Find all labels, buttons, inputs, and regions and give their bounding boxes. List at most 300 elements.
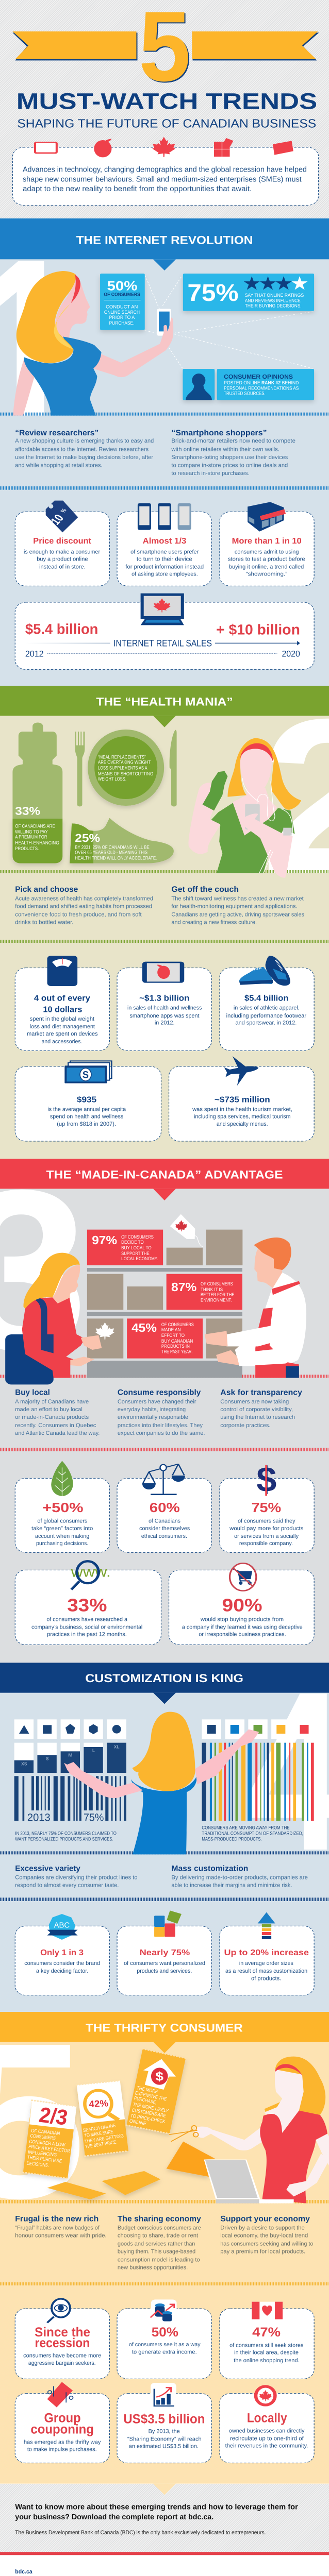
icon: eye magnifier — [47, 2299, 70, 2323]
card: group couponing: Group — [44, 2411, 81, 2425]
heading and text: consume responsibly: everyday habits, integrating — [118, 1406, 186, 1412]
chart: size bars: L — [92, 1748, 95, 1753]
panel: 50% of consumers: OF CONSUMERS — [104, 292, 140, 297]
heading and text: consume responsibly: expect companies to do the same. — [118, 1430, 205, 1436]
heading and text: the sharing economy: The sharing economy — [118, 2214, 201, 2223]
panel: 87% environment: ENVIRONMENT. — [201, 1297, 232, 1303]
receipt: 2/3 of canadian consumers: PRICE A KEY FACTOR — [28, 2144, 71, 2154]
stripe divider — [0, 940, 329, 943]
icon: growth chart — [151, 2383, 176, 2408]
chart: running shoe 25%: 25% — [75, 832, 100, 844]
card: 90% would stop buying: 90% — [222, 1595, 262, 1615]
receipt: price-check online: CUSTOMERS ARE — [131, 2107, 167, 2119]
panel: internet retail sales: + $10 billion — [216, 621, 300, 638]
connector lines — [145, 275, 312, 368]
panel: introduction: adapt to the new reality to benefit from the opportunities that await. — [23, 184, 252, 193]
card: locally owned businesses: owned businesses can directly — [229, 2428, 305, 2434]
heading and text: get off the couch: The shift toward wellness has created a new market — [171, 895, 304, 902]
panel: 45% buy canadian: THE PAST YEAR. — [161, 1349, 193, 1354]
panel: 87% environment: OF CONSUMERS — [201, 1281, 233, 1286]
panel: 75% ratings — [183, 274, 314, 311]
heading and text: the sharing economy: consumption model is leading to — [118, 2256, 200, 2263]
icon: leaf — [51, 1461, 73, 1498]
card: 75%: 75% — [251, 1500, 281, 1515]
card: group couponing — [15, 2382, 109, 2463]
icon: store — [248, 502, 286, 532]
heading and text: pick and choose: food demand and shifted eating habits from processed — [15, 903, 152, 909]
section header — [0, 1663, 329, 1704]
card: locally owned businesses: their revenues in the community. — [225, 2443, 308, 2449]
card: $5.4 billion: $5.4 billion — [244, 994, 288, 1003]
card: $735 million: ~$735 million — [215, 1095, 270, 1104]
icon: price tag: 10 — [48, 512, 67, 527]
card: only 1 in 3: a key deciding factor. — [36, 1968, 88, 1974]
chart: size bars: M — [68, 1752, 72, 1757]
panel: 87% environment: 87% — [171, 1280, 196, 1294]
card: almost 1/3 — [117, 503, 211, 586]
card: 33% researched: of consumers have researched a — [46, 1616, 127, 1622]
heading and text: buy local: Buy local — [15, 1388, 50, 1397]
stripe divider — [0, 2282, 329, 2285]
panel: 75% ratings: 75% — [187, 279, 239, 306]
heading and text: frugal is the new rich: Frugal is the new rich — [15, 2214, 98, 2223]
stripe divider — [0, 1897, 329, 1901]
card: since the recession — [15, 2299, 109, 2379]
icon: upward arrow — [258, 1912, 275, 1939]
heading and text: mass customization: able to increase their margins and minimize risk. — [171, 1882, 292, 1888]
panel: consumer opinions: CONSUMER OPINIONS — [224, 374, 293, 380]
card: locally owned businesses — [220, 2386, 314, 2463]
card: $735 million: was spent in the health tourism market, — [192, 1106, 292, 1112]
heading and text: consume responsibly: Consume responsibly — [118, 1388, 201, 1397]
card: nearly 75% — [117, 1910, 211, 1995]
panel: 97% buy local: LOCAL ECONOMY. — [121, 1256, 158, 1261]
receipt: 2/3 of canadian consumers: DECISIONS. — [26, 2160, 50, 2168]
panel: 97% buy local: OF CONSUMERS — [121, 1234, 154, 1240]
card: locally owned businesses: recirculate up to one-third of — [230, 2435, 304, 2442]
panel: internet retail sales: $5.4 billion — [25, 621, 98, 637]
panel: plate with meal replacements: LOSS SUPPLEMENTS AS A — [98, 765, 147, 770]
heading and text: the sharing economy: buying them. This usage-based — [118, 2248, 195, 2255]
panel: 45% buy canadian: MADE AN — [161, 1327, 181, 1332]
card: up to 20% increase: in average order sizes — [239, 1960, 293, 1966]
section header: THE “MADE-IN-CANADA” ADVANTAGE — [46, 1168, 283, 1181]
card: nearly 75%: products and services. — [137, 1968, 192, 1974]
chart: product shapes — [14, 1719, 126, 1739]
card: +50%: purchasing decisions. — [36, 1540, 88, 1546]
card: $1.3 billion: smartphone apps was spent — [129, 1012, 200, 1019]
icon: heart flag — [252, 2302, 283, 2319]
card: 4 out of every 10 dollars: 4 out of every — [34, 994, 90, 1003]
panel: 97% buy local: 97% — [92, 1233, 117, 1247]
card: 4 out of every 10 dollars: and accessories. — [42, 1038, 83, 1044]
icon: bathroom scale — [47, 956, 77, 986]
card: US$3.5 billion: an estimated US$3.5 billion. — [129, 2443, 199, 2449]
card: 33% researched — [15, 1561, 161, 1645]
receipt: price-check online — [126, 2049, 186, 2134]
heading and text: excessive variety: Excessive variety — [15, 1864, 80, 1873]
heading and text: the sharing economy — [118, 2214, 201, 2270]
title: MUST-WATCH TRENDS — [17, 89, 317, 114]
card: more than 1 in 10: buying it online, a trend called — [229, 563, 304, 570]
card: 90% would stop buying: would stop buying products from — [201, 1616, 284, 1622]
receipt: price-check online: EXPENSIVE THE — [135, 2090, 168, 2102]
card: group couponing: couponing — [30, 2422, 94, 2436]
chart: running shoe 25% — [70, 818, 174, 863]
heading and text: consume responsibly — [118, 1388, 205, 1436]
stripe divider — [0, 486, 329, 490]
icon: balance scale — [142, 1464, 185, 1495]
card: more than 1 in 10: consumers admit to using — [235, 548, 299, 555]
panel: 45% buy canadian: OF CONSUMERS — [161, 1322, 194, 1327]
panel: 87% environment: BETTER FOR THE — [201, 1292, 234, 1297]
icon: running shoes — [239, 956, 290, 986]
footer — [0, 2484, 329, 2576]
card: $935: (up from $818 in 2007). — [57, 1121, 116, 1127]
section header — [0, 686, 329, 727]
panel: introduction — [12, 147, 319, 205]
card: 60%: 60% — [150, 1500, 180, 1515]
card: 60% — [117, 1464, 211, 1552]
stripe divider — [0, 870, 329, 873]
card: since the recession: consumers have become more — [23, 2352, 101, 2359]
heading and text: the sharing economy: goods and services rather than — [118, 2241, 195, 2247]
card: $935: $935 — [77, 1095, 96, 1104]
card: US$3.5 billion — [117, 2383, 211, 2463]
heading and text: excessive variety: Companies are diversifying their product lines to — [15, 1874, 138, 1880]
chart: running shoe 25%: OVER 65 YEARS OLD - MEANING THIS — [75, 850, 147, 855]
illustration: woman with water bottle — [189, 738, 301, 878]
card: 50% extra income — [117, 2299, 211, 2379]
illustration: woman choosing products — [64, 1712, 259, 1854]
ribbon: left — [12, 31, 138, 60]
receipt: 2/3 of canadian consumers: CONSUMERS — [30, 2133, 56, 2141]
icon: www magnifier — [71, 1561, 111, 1589]
section 4: customization is king — [0, 1645, 329, 1995]
card: $5.4 billion: and sportswear, in 2012. — [236, 1020, 297, 1026]
chart: water bottle 33%: WILLING TO PAY — [15, 829, 48, 834]
heading and text: review researchers: and while shopping at retail stores. — [15, 462, 103, 468]
card: up to 20% increase — [220, 1912, 314, 1995]
illustration: woman cutting coupon — [194, 2057, 329, 2204]
panel: plate with meal replacements — [88, 730, 164, 806]
website link: bdc.ca — [15, 2568, 32, 2574]
icon: apple — [94, 139, 111, 157]
background: hatched closing band — [0, 2484, 329, 2552]
card: $1.3 billion: ~$1.3 billion — [139, 994, 189, 1003]
illustration: woman with phone — [13, 271, 173, 416]
icon: consumer silhouette — [183, 369, 215, 400]
panel: plate with meal replacements: WEIGHT LOSS. — [98, 776, 126, 782]
panel: 50% of consumers: 50% — [107, 278, 138, 293]
chart: running shoe 25%: BY 2031, 25% OF CANADIANS WILL BE — [75, 844, 150, 850]
panel: 87% environment: THINK IT IS — [201, 1287, 223, 1292]
closing call to action: your business? Download the complete report at bdc.ca. — [15, 2513, 213, 2521]
card: $735 million: including spa services, medical tourism — [194, 1113, 291, 1120]
card: 50% extra income: 50% — [152, 2325, 178, 2340]
heading and text: buy local: or made-in-Canada products — [15, 1414, 89, 1420]
icon: price tag: % — [59, 507, 68, 514]
card: 75%: of consumers said they — [238, 1518, 295, 1524]
heading and text: mass customization — [171, 1864, 308, 1888]
icon: white maple leaf — [95, 1323, 114, 1340]
icon: price tag — [46, 501, 78, 532]
icon: scissors — [169, 2126, 199, 2142]
heading and text: frugal is the new rich — [15, 2214, 107, 2239]
panel: 97% buy local: DECIDE TO — [121, 1240, 144, 1245]
icon: puzzle — [214, 138, 234, 157]
card: $735 million: and specialty menus. — [217, 1121, 268, 1127]
heading and text: excessive variety: respond to almost every consumer taste. — [15, 1882, 119, 1888]
card: almost 1/3: to turn to their device — [137, 555, 192, 562]
heading and text: the sharing economy: new business opportunities. — [118, 2264, 188, 2270]
ribbon: right — [192, 31, 319, 60]
card: locally owned businesses: Locally — [247, 2411, 287, 2425]
section header: THE “HEALTH MANIA” — [96, 695, 233, 708]
card: up to 20% increase: Up to 20% increase — [224, 1948, 309, 1957]
heading and text: pick and choose: Pick and choose — [15, 885, 78, 893]
chart: size bars: XL — [114, 1744, 120, 1749]
illustration: woman shopper — [5, 1253, 102, 1384]
section header — [0, 1159, 329, 1200]
card: price discount: buy a product online — [37, 555, 88, 562]
card: 47% local stores: the online shopping trend. — [234, 2357, 300, 2363]
icon: rating stars — [244, 276, 308, 290]
section header: THE INTERNET REVOLUTION — [76, 233, 253, 246]
receipt: price-check online: THE MORE LIKELY — [133, 2102, 169, 2113]
receipt: 42% search online: TO MAKE SURE — [84, 2129, 114, 2138]
heading and text: get off the couch: for health-monitoring equipment and applications. — [171, 903, 298, 909]
heading and text: buy local: recently. Consumers in Quebec — [15, 1422, 96, 1428]
card: 47% local stores: 47% — [252, 2325, 281, 2340]
chart: sales timeline — [25, 638, 300, 658]
card: price discount: is enough to make a consumer — [24, 548, 100, 555]
chart: left barcode 2013 75% — [14, 1776, 126, 1823]
heading and text: the sharing economy: Budget-conscious consumers are — [118, 2225, 201, 2231]
card: nearly 75%: of consumers want personalized — [124, 1960, 205, 1966]
chart: sales timeline: INTERNET RETAIL SALES — [113, 638, 212, 648]
chart: multicolour barcode — [202, 1743, 314, 1821]
panel: 45% buy canadian: PRODUCTS IN — [161, 1344, 190, 1349]
panel: 87% environment — [167, 1274, 242, 1310]
card: almost 1/3: for product information instead — [125, 563, 204, 570]
chart: sales timeline: 2020 — [282, 649, 300, 658]
card: almost 1/3: Almost 1/3 — [143, 536, 186, 546]
heading and text: get off the couch: and creating a new fitness culture. — [171, 919, 257, 925]
icon: fork — [75, 732, 85, 806]
card: only 1 in 3 — [15, 1914, 109, 1995]
receipt: 42% search online: SEARCH ONLINE — [83, 2123, 117, 2133]
heading and text: consume responsibly: practices into their lifestyles. They — [118, 1422, 203, 1428]
section 5: the thrifty consumer — [0, 1997, 329, 2463]
heading and text: mass customization: Mass customization — [171, 1864, 248, 1873]
card: 33% researched: company’s business, social or environmental — [31, 1624, 142, 1630]
heading and text: ask for transparency: Consumers are now taking — [220, 1398, 289, 1404]
panel: 45% buy canadian: 45% — [131, 1321, 157, 1334]
panel: 75% ratings: AND REVIEWS INFLUENCE — [245, 298, 301, 303]
receipt: 2/3 of canadian consumers: THEIR PURCHASE — [27, 2155, 62, 2164]
card: 60%: ethical consumers. — [141, 1533, 187, 1539]
heading and text: the sharing economy: choosing to share, trade or rent — [118, 2232, 198, 2239]
card: almost 1/3: of smartphone users prefer — [130, 548, 199, 555]
card: 50% extra income: of consumers see it as a way — [129, 2341, 201, 2347]
callout pointer — [153, 2484, 176, 2495]
panel: 45% buy canadian: BUY CANADIAN — [161, 1338, 193, 1344]
heading and text: smartphone shoppers: “Smartphone shoppers” — [171, 428, 267, 437]
section 1: the internet revolution — [0, 204, 329, 669]
panel: plate with meal replacements: “MEAL REPLACEMENTS” — [98, 754, 146, 760]
closing call to action — [15, 2503, 298, 2521]
chart: water bottle 33% — [12, 722, 62, 863]
heading and text: smartphone shoppers: with online retailers within their own walls. — [171, 446, 279, 452]
stripe divider — [0, 1448, 329, 1451]
stripe divider — [0, 413, 329, 416]
section header — [0, 2012, 329, 2053]
heading and text: consume responsibly: environmentally responsible — [118, 1414, 188, 1420]
text: personalized products: IN 2013, NEARLY 75% OF CONSUMERS CLAIMED TO — [15, 1831, 117, 1836]
card: +50%: of global consumers — [37, 1518, 87, 1524]
heading and text: ask for transparency: control of corporate visibility, — [220, 1406, 293, 1412]
chart: water bottle 33%: PRODUCTS. — [15, 846, 39, 851]
heading and text: support your economy: Driven by a desire to support the — [220, 2225, 305, 2231]
icon: brand badge — [47, 1914, 78, 1940]
card: 90% would stop buying: a company if they learned it was using deceptive — [182, 1624, 303, 1630]
card: US$3.5 billion: US$3.5 billion — [123, 2412, 205, 2426]
receipt: 2/3 of canadian consumers: OF CANADIAN — [31, 2128, 60, 2136]
card: nearly 75%: Nearly 75% — [140, 1948, 190, 1957]
heading and text: support your economy: local economy, the buy-local trend — [220, 2232, 308, 2239]
heading and text: pick and choose — [15, 885, 153, 925]
card: 4 out of every 10 dollars: loss and diet management — [30, 1023, 95, 1029]
card: more than 1 in 10 — [220, 502, 314, 586]
icon: puzzle pieces — [154, 1910, 182, 1937]
panel: consumer opinions: PERSONAL RECOMMENDATIONS AS — [224, 385, 299, 391]
card: 4 out of every 10 dollars: 10 dollars — [43, 1005, 83, 1014]
icon: house with dollar: $ — [156, 2070, 163, 2083]
heading and text: support your economy: pay a premium for local products. — [220, 2248, 305, 2255]
icon: three smartphones — [138, 503, 191, 530]
receipt: 42% search online: THE BEST PRICE — [85, 2139, 117, 2149]
icon: tablet with apple — [142, 962, 184, 983]
text: personalized products — [15, 1831, 117, 1842]
receipt: price-check online: ONLINE — [129, 2118, 147, 2126]
icon: coins with arrows — [151, 2299, 177, 2322]
section 3: the made-in-canada advantage — [0, 1142, 329, 1645]
card: 47% local stores: in their local area, despite — [234, 2349, 299, 2355]
card: up to 20% increase: of products. — [251, 1975, 281, 1981]
chart: left barcode 2013 75%: 2013 — [27, 1811, 51, 1823]
panel: 97% buy local — [87, 1230, 163, 1265]
card: 75%: responsible company. — [239, 1540, 293, 1546]
icon: www magnifier: www. — [71, 1563, 111, 1580]
chart: water bottle 33%: HEALTH-ENHANCING — [15, 840, 59, 845]
card: 75%: or services from a socially — [234, 1533, 299, 1539]
card: 4 out of every 10 dollars: spent in the global weight — [30, 1015, 94, 1022]
panel: 75% ratings: SAY THAT ONLINE RATINGS — [245, 293, 304, 298]
heading and text: review researchers: affordable access to the Internet. Review researchers — [15, 446, 149, 452]
heading and text: pick and choose: convenience food to fresh produce, and from soft — [15, 911, 142, 918]
card: only 1 in 3: Only 1 in 3 — [40, 1948, 84, 1957]
card: 90% would stop buying — [169, 1563, 314, 1645]
card: 50% extra income: to generate extra income. — [132, 2349, 197, 2355]
card: US$3.5 billion: “Sharing Economy” will reach — [127, 2435, 202, 2442]
card: more than 1 in 10: More than 1 in 10 — [232, 536, 302, 546]
card: +50% — [15, 1461, 109, 1552]
section 2: the health mania — [0, 673, 329, 1141]
panel: 50% of consumers: PRIOR TO A — [109, 315, 135, 320]
panel: 50% of consumers — [100, 274, 145, 330]
receipt: 42% search online: 42% — [89, 2098, 109, 2109]
card: since the recession: recession — [35, 2335, 90, 2350]
icon: stack of money — [64, 1061, 111, 1083]
chart: water bottle 33%: OF CANADIANS ARE — [15, 823, 55, 829]
card: +50%: take “green” factors into — [31, 1525, 93, 1531]
icon: recirculating maple leaf — [256, 2386, 275, 2405]
card: since the recession: Since the — [35, 2325, 90, 2340]
chart: size bars — [14, 1743, 126, 1773]
receipt: 42% search online: THEY ARE GETTING — [84, 2133, 124, 2144]
heading and text: review researchers: “Review researchers” — [15, 428, 98, 437]
panel: internet retail sales — [15, 594, 314, 669]
heading and text: ask for transparency: Ask for transparency — [220, 1388, 302, 1397]
icon: coupon with scissors — [47, 2382, 73, 2408]
icon: crossed-out shopping cart — [230, 1563, 256, 1591]
heading and text: smartphone shoppers: Brick-and-mortar retailers now need to compete — [171, 437, 295, 444]
text: moving away from standardized products — [202, 1825, 303, 1842]
card: $5.4 billion: in sales of athletic apparel, — [234, 1004, 300, 1011]
icon: laptop with maple leaf — [141, 594, 184, 625]
heading and text: buy local: and Atlantic Canada lead the way. — [15, 1430, 100, 1436]
heading and text: ask for transparency: corporate practices. — [220, 1422, 270, 1428]
store shelves — [87, 1230, 242, 1378]
panel: consumer opinions — [217, 369, 314, 400]
coupon scraps — [47, 2142, 215, 2199]
panel: 50% of consumers: ONLINE SEARCH — [104, 310, 140, 315]
chart: sales timeline: 2012 — [25, 649, 44, 658]
card: +50%: account when making — [35, 1533, 89, 1539]
card: group couponing: to make impulse purchases. — [27, 2446, 97, 2452]
heading and text: frugal is the new rich: honour consumers wear with pride. — [15, 2232, 107, 2239]
card: 60%: consider themselves — [139, 1525, 190, 1531]
chart: size bars: S — [46, 1756, 48, 1761]
panel: consumer opinions: POSTED ONLINE RANK #2 BEHIND — [224, 380, 299, 385]
receipt: 2/3 of canadian consumers — [23, 2100, 77, 2178]
card: US$3.5 billion: By 2013, the — [149, 2428, 180, 2434]
chart: water bottle 33%: A PREMIUM FOR — [15, 834, 47, 839]
stripe divider — [0, 1375, 329, 1378]
card: 33% researched: 33% — [67, 1595, 107, 1615]
heading and text: get off the couch: Get off the couch — [171, 885, 239, 893]
heading and text: review researchers: use the Internet to make buying decisions before, after — [15, 454, 153, 460]
panel: consumer opinions: TRUSTED SOURCES. — [224, 391, 266, 396]
chart: running shoe 25%: HEALTH TREND WILL ONLY ACCELERATE. — [75, 855, 157, 860]
icon: brand badge: ABC — [54, 1921, 70, 1929]
icon: canadian price tag — [170, 1214, 203, 1247]
panel: plate with meal replacements: ARE OVERTAKING WEIGHT — [98, 759, 151, 765]
heading and text: smartphone shoppers — [171, 428, 295, 476]
heading and text: smartphone shoppers: to compare in-store prices to online deals and — [171, 462, 288, 468]
stripe divider — [0, 1851, 329, 1854]
receipt: 2/3 of canadian consumers: CONSIDER A LOW — [29, 2139, 65, 2147]
heading and text: review researchers: A new shopping culture is emerging thanks to easy and — [15, 437, 154, 444]
heading and text: smartphone shoppers: to research in-store purchases. — [171, 470, 250, 476]
panel: 45% buy canadian: EFFORT TO — [161, 1333, 185, 1338]
card: $735 million — [169, 1056, 314, 1141]
panel: 75% ratings: THEIR BUYING DECISIONS. — [245, 303, 302, 309]
card: 4 out of every 10 dollars: market are spent on devices — [27, 1030, 98, 1037]
panel: plate with meal replacements: MEANS OF SHORTCUTTING — [98, 771, 153, 776]
receipt: 2/3 of canadian consumers: INFLUENCING — [27, 2149, 57, 2158]
